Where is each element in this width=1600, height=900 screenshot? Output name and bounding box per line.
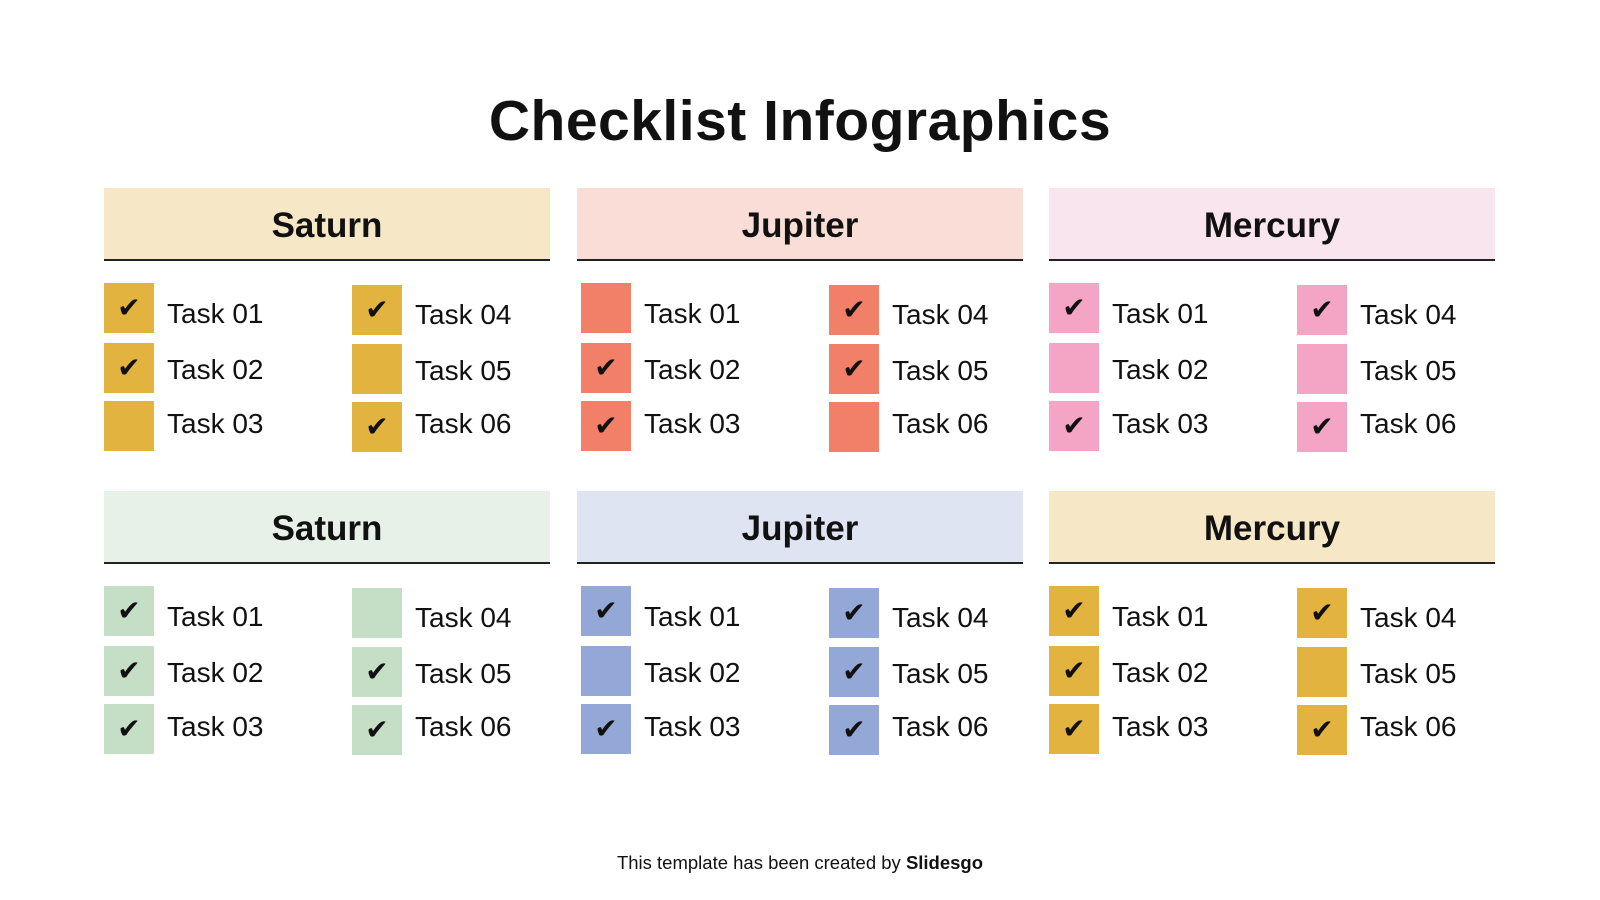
header: Mercury: Mercury [1204,509,1340,548]
header: Saturn [104,491,550,564]
header: Mercury: Mercury [1204,206,1340,245]
task 01: ✔ [1062,594,1086,627]
task 03: Task 03 [644,408,740,439]
task 06 [352,705,512,755]
task 04: ✔ [842,596,866,629]
header: Mercury [1049,188,1495,261]
task 04 [352,588,512,638]
task 04 [352,285,512,335]
task 06 [352,402,512,452]
task 02: ✔ [117,654,141,687]
panel: Mercury top [1049,188,1495,452]
panel: Saturn bottom [104,491,550,755]
panel: Saturn top [104,188,550,452]
task 06 [1297,402,1456,452]
task 03 [1049,704,1208,754]
task 01 [104,586,264,636]
task 04: ✔ [1310,596,1334,629]
task 02 [581,343,740,393]
panel: Jupiter bottom [577,491,1023,755]
task 05: ✔ [365,655,389,688]
task 04 [829,285,988,335]
task 01 [1049,586,1208,636]
task 03: ✔ [117,712,141,745]
task 02 [1049,343,1208,393]
task 02 [581,646,740,696]
task 04: Task 04 [892,602,988,633]
task 04: ✔ [1310,293,1334,326]
task 01: Task 01 [167,601,264,632]
task 03: Task 03 [644,711,740,742]
task 04: Task 04 [415,299,512,330]
task 02: ✔ [117,351,141,384]
task 02: ✔ [594,351,618,384]
task 06: Task 06 [892,711,988,742]
task 04 [1297,285,1456,335]
task 06: ✔ [842,713,866,746]
header: Saturn [104,188,550,261]
task 01: ✔ [594,594,618,627]
task 01: Task 01 [1112,601,1208,632]
task 01: ✔ [117,594,141,627]
task 02 [1049,646,1208,696]
task 01: ✔ [1062,291,1086,324]
title: Checklist Infographics [489,89,1111,153]
task 06: ✔ [1310,410,1334,443]
task 02: Task 02 [167,657,264,688]
header: Saturn: Saturn [272,206,382,245]
task 03 [104,704,264,754]
header: Saturn: Saturn [272,509,382,548]
task 04: Task 04 [892,299,988,330]
task 01: ✔ [117,291,141,324]
task 01 [581,586,740,636]
task 01 [1049,283,1208,333]
header: Jupiter: Jupiter [742,206,858,245]
task 04: ✔ [842,293,866,326]
task 05: ✔ [842,352,866,385]
task 01 [104,283,264,333]
task 05 [352,647,512,697]
task 06: ✔ [365,410,389,443]
task 05: ✔ [842,655,866,688]
task 05: Task 05 [415,658,512,689]
task 06 [829,402,988,452]
task 06: Task 06 [1360,711,1456,742]
task 05: Task 05 [1360,355,1456,386]
task 03: ✔ [1062,409,1086,442]
header: Jupiter: Jupiter [742,509,858,548]
header: Jupiter [577,188,1023,261]
task 06 [829,705,988,755]
task 02: Task 02 [1112,657,1208,688]
task 01: Task 01 [167,298,264,329]
task 06: Task 06 [415,711,512,742]
task 02: Task 02 [167,354,264,385]
footer: This template has been created by Slidesgo [617,852,983,873]
task 05 [829,647,988,697]
header: Jupiter [577,491,1023,564]
header: Mercury [1049,491,1495,564]
task 03 [1049,401,1208,451]
task 06: Task 06 [1360,408,1456,439]
task 02: Task 02 [644,354,740,385]
task 02: ✔ [1062,654,1086,687]
panel: Jupiter top [577,188,1023,452]
task 06: ✔ [365,713,389,746]
task 06: Task 06 [415,408,512,439]
task 01: Task 01 [1112,298,1208,329]
task 05 [1297,344,1456,394]
task 02 [104,343,264,393]
task 05 [352,344,512,394]
task 04: Task 04 [1360,299,1456,330]
task 03: Task 03 [167,711,264,742]
task 03: Task 03 [167,408,264,439]
task 02: Task 02 [1112,354,1208,385]
task 03 [581,704,740,754]
task 04: ✔ [365,293,389,326]
task 05: Task 05 [892,355,988,386]
task 05: Task 05 [415,355,512,386]
task 05 [829,344,988,394]
task 03 [581,401,740,451]
task 02 [104,646,264,696]
task 03: ✔ [594,712,618,745]
task 03: Task 03 [1112,408,1208,439]
task 04: Task 04 [1360,602,1456,633]
task 06: ✔ [1310,713,1334,746]
task 04: Task 04 [415,602,512,633]
task 04 [1297,588,1456,638]
task 04 [829,588,988,638]
task 06 [1297,705,1497,755]
task 05: Task 05 [1360,658,1456,689]
task 01: Task 01 [644,298,740,329]
task 02: Task 02 [644,657,740,688]
task 05 [1297,647,1497,697]
panel: Mercury bottom [1049,491,1495,755]
task 06: Task 06 [892,408,988,439]
task 03: ✔ [1062,712,1086,745]
task 03 [104,401,264,451]
task 03: Task 03 [1112,711,1208,742]
task 01: Task 01 [644,601,740,632]
task 03: ✔ [594,409,618,442]
task 05: Task 05 [892,658,988,689]
task 01 [581,283,740,333]
